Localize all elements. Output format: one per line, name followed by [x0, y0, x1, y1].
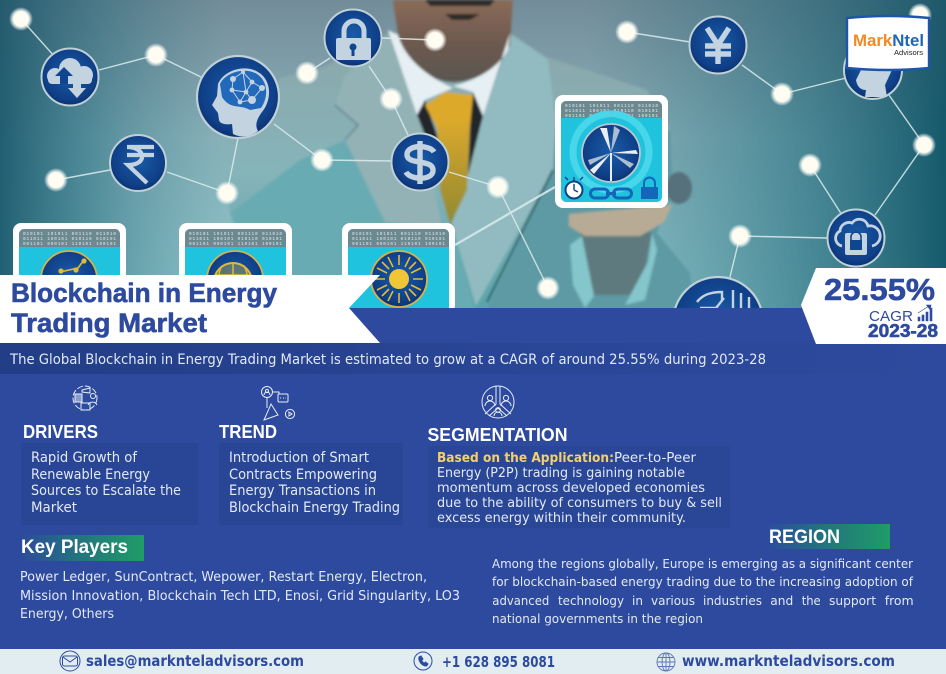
logo: MarkNtel Advisors — [847, 16, 929, 70]
CAGR badge — [801, 268, 946, 344]
icon: brain network head — [197, 56, 279, 138]
card: wind turbine blockchain: 001101 000101 110101 100101 — [565, 114, 658, 119]
panel: drivers — [21, 443, 198, 525]
logo: MarkNtel Advisors: MarkNtel — [853, 31, 924, 50]
hero photo background — [0, 0, 946, 310]
text: region description: Among the regions globally, Europe is emerging as a significant center — [492, 556, 914, 571]
panel: trend: Contracts Empowering — [229, 467, 377, 483]
panel: segmentation: due to the ability of consumers to buy & sell — [437, 496, 722, 511]
CAGR badge: CAGR — [869, 308, 913, 325]
heading: region: REGION — [769, 527, 840, 548]
card: growth chart: 001101 000101 110101 100101 — [23, 242, 116, 247]
icon: trend — [262, 386, 295, 420]
panel: drivers: Market — [31, 500, 78, 516]
icon: envelope — [60, 651, 80, 671]
panel: drivers: Sources to Escalate the — [31, 483, 181, 499]
icon: globe — [657, 653, 675, 671]
text: region description — [492, 556, 914, 626]
text: region description: the — [802, 593, 821, 608]
glowing network nodes — [9, 3, 936, 300]
title banner: Trading Market — [11, 308, 207, 338]
heading: drivers: DRIVERS — [23, 422, 98, 442]
heading: key players: Key Players — [21, 537, 128, 558]
icon: padlock — [324, 10, 382, 66]
panel: segmentation: excess energy within their community. — [437, 511, 686, 526]
text: key players list: Power Ledger, SunContract, Wepower, Restart Energy, Electron, — [20, 570, 427, 585]
icon: head behind logo — [844, 41, 902, 99]
panel: drivers: Rapid Growth of — [31, 450, 138, 466]
card: wind turbine blockchain — [555, 95, 668, 208]
panel: trend: Blockchain Energy Trading — [229, 500, 400, 516]
icon: circuit board coin — [673, 277, 763, 367]
text: region description: industries — [703, 593, 762, 608]
heading: trend: TREND — [219, 422, 277, 442]
text: region description: national governments in the region — [492, 611, 703, 626]
card: wind turbine blockchain: 011011 100101 010110 010101 — [565, 109, 658, 114]
footer bar: +1 628 895 8081 — [442, 653, 555, 671]
text: region description: for blockchain-based energy trading due to the increasing adoption of — [492, 574, 913, 589]
panel: trend — [219, 443, 403, 525]
heading: region — [765, 524, 890, 549]
businessman figure — [220, 0, 693, 310]
panel: segmentation: Based on the Application: — [437, 451, 614, 466]
card: globe: 010101 101011 001110 011010 — [189, 232, 282, 237]
card: growth chart — [13, 223, 126, 314]
heading: segmentation: SEGMENTATION — [428, 425, 568, 445]
footer bar — [0, 649, 946, 674]
icon: yen coin — [690, 16, 746, 74]
card: globe: 011011 100101 010110 010101 — [189, 237, 282, 242]
card: sun — [342, 223, 455, 314]
panel: trend: Energy Transactions in — [229, 483, 376, 499]
text: key players list: Energy, Others — [20, 607, 114, 622]
text: region description: technology — [558, 593, 624, 608]
card: sun: 001101 000101 110101 100101 — [352, 242, 445, 247]
card: sun: 010101 101011 001110 011010 — [352, 232, 445, 237]
card: growth chart: 010101 101011 001110 011010 — [23, 232, 116, 237]
icon: dollar coin — [392, 134, 448, 190]
footer bar: sales@marknteladvisors.com — [86, 652, 304, 670]
panel: drivers: Renewable Energy — [31, 467, 150, 483]
CAGR badge: 2023-28 — [868, 321, 938, 341]
card: growth chart: 011011 100101 010110 010101 — [23, 237, 116, 242]
card: globe — [179, 223, 292, 314]
icon: rupee coin — [110, 135, 166, 191]
CAGR badge: 25.55% — [824, 272, 935, 307]
text: key players list — [20, 570, 460, 622]
icon: drivers globe — [73, 386, 97, 410]
text: region description: in — [632, 593, 643, 608]
card: globe: 001101 000101 110101 100101 — [189, 242, 282, 247]
icon: growth chart — [918, 305, 932, 321]
text: region description: support — [829, 593, 876, 608]
text: region description: and — [770, 593, 793, 608]
network connector lines — [21, 19, 924, 288]
text: region description: from — [885, 593, 914, 608]
panel: segmentation: Peer-to-Peer — [614, 451, 697, 466]
panel: segmentation — [428, 446, 730, 528]
title banner: Blockchain in Energy — [11, 278, 277, 308]
summary band: The Global Blockchain in Energy Trading Market is estimated to grow at a CAGR of around 25.55% during 2023-28 — [9, 352, 766, 368]
panel: trend: Introduction of Smart — [229, 450, 370, 466]
panel: segmentation: momentum across developed economies — [437, 481, 705, 496]
blue main panel — [0, 308, 946, 649]
icon: segmentation — [482, 386, 514, 418]
logo: MarkNtel Advisors: Advisors — [894, 48, 923, 57]
footer bar: www.marknteladvisors.com — [682, 652, 895, 670]
card: sun: 011011 100101 010110 010101 — [352, 237, 445, 242]
icon: cloud security lock — [828, 210, 884, 266]
icon: cloud upload and download — [42, 48, 98, 106]
text: key players list: Mission Innovation, Blockchain Tech LTD, Enosi, Grid Singularity, LO3 — [20, 589, 460, 604]
summary band — [0, 343, 946, 374]
panel: segmentation: Energy (P2P) trading is gaining notable — [437, 466, 685, 481]
icon: phone — [414, 652, 432, 670]
text: region description: various — [651, 593, 695, 608]
title banner — [0, 275, 380, 343]
card: wind turbine blockchain: 010101 101011 001110 011010 — [565, 104, 658, 109]
text: region description: advanced — [492, 593, 549, 608]
